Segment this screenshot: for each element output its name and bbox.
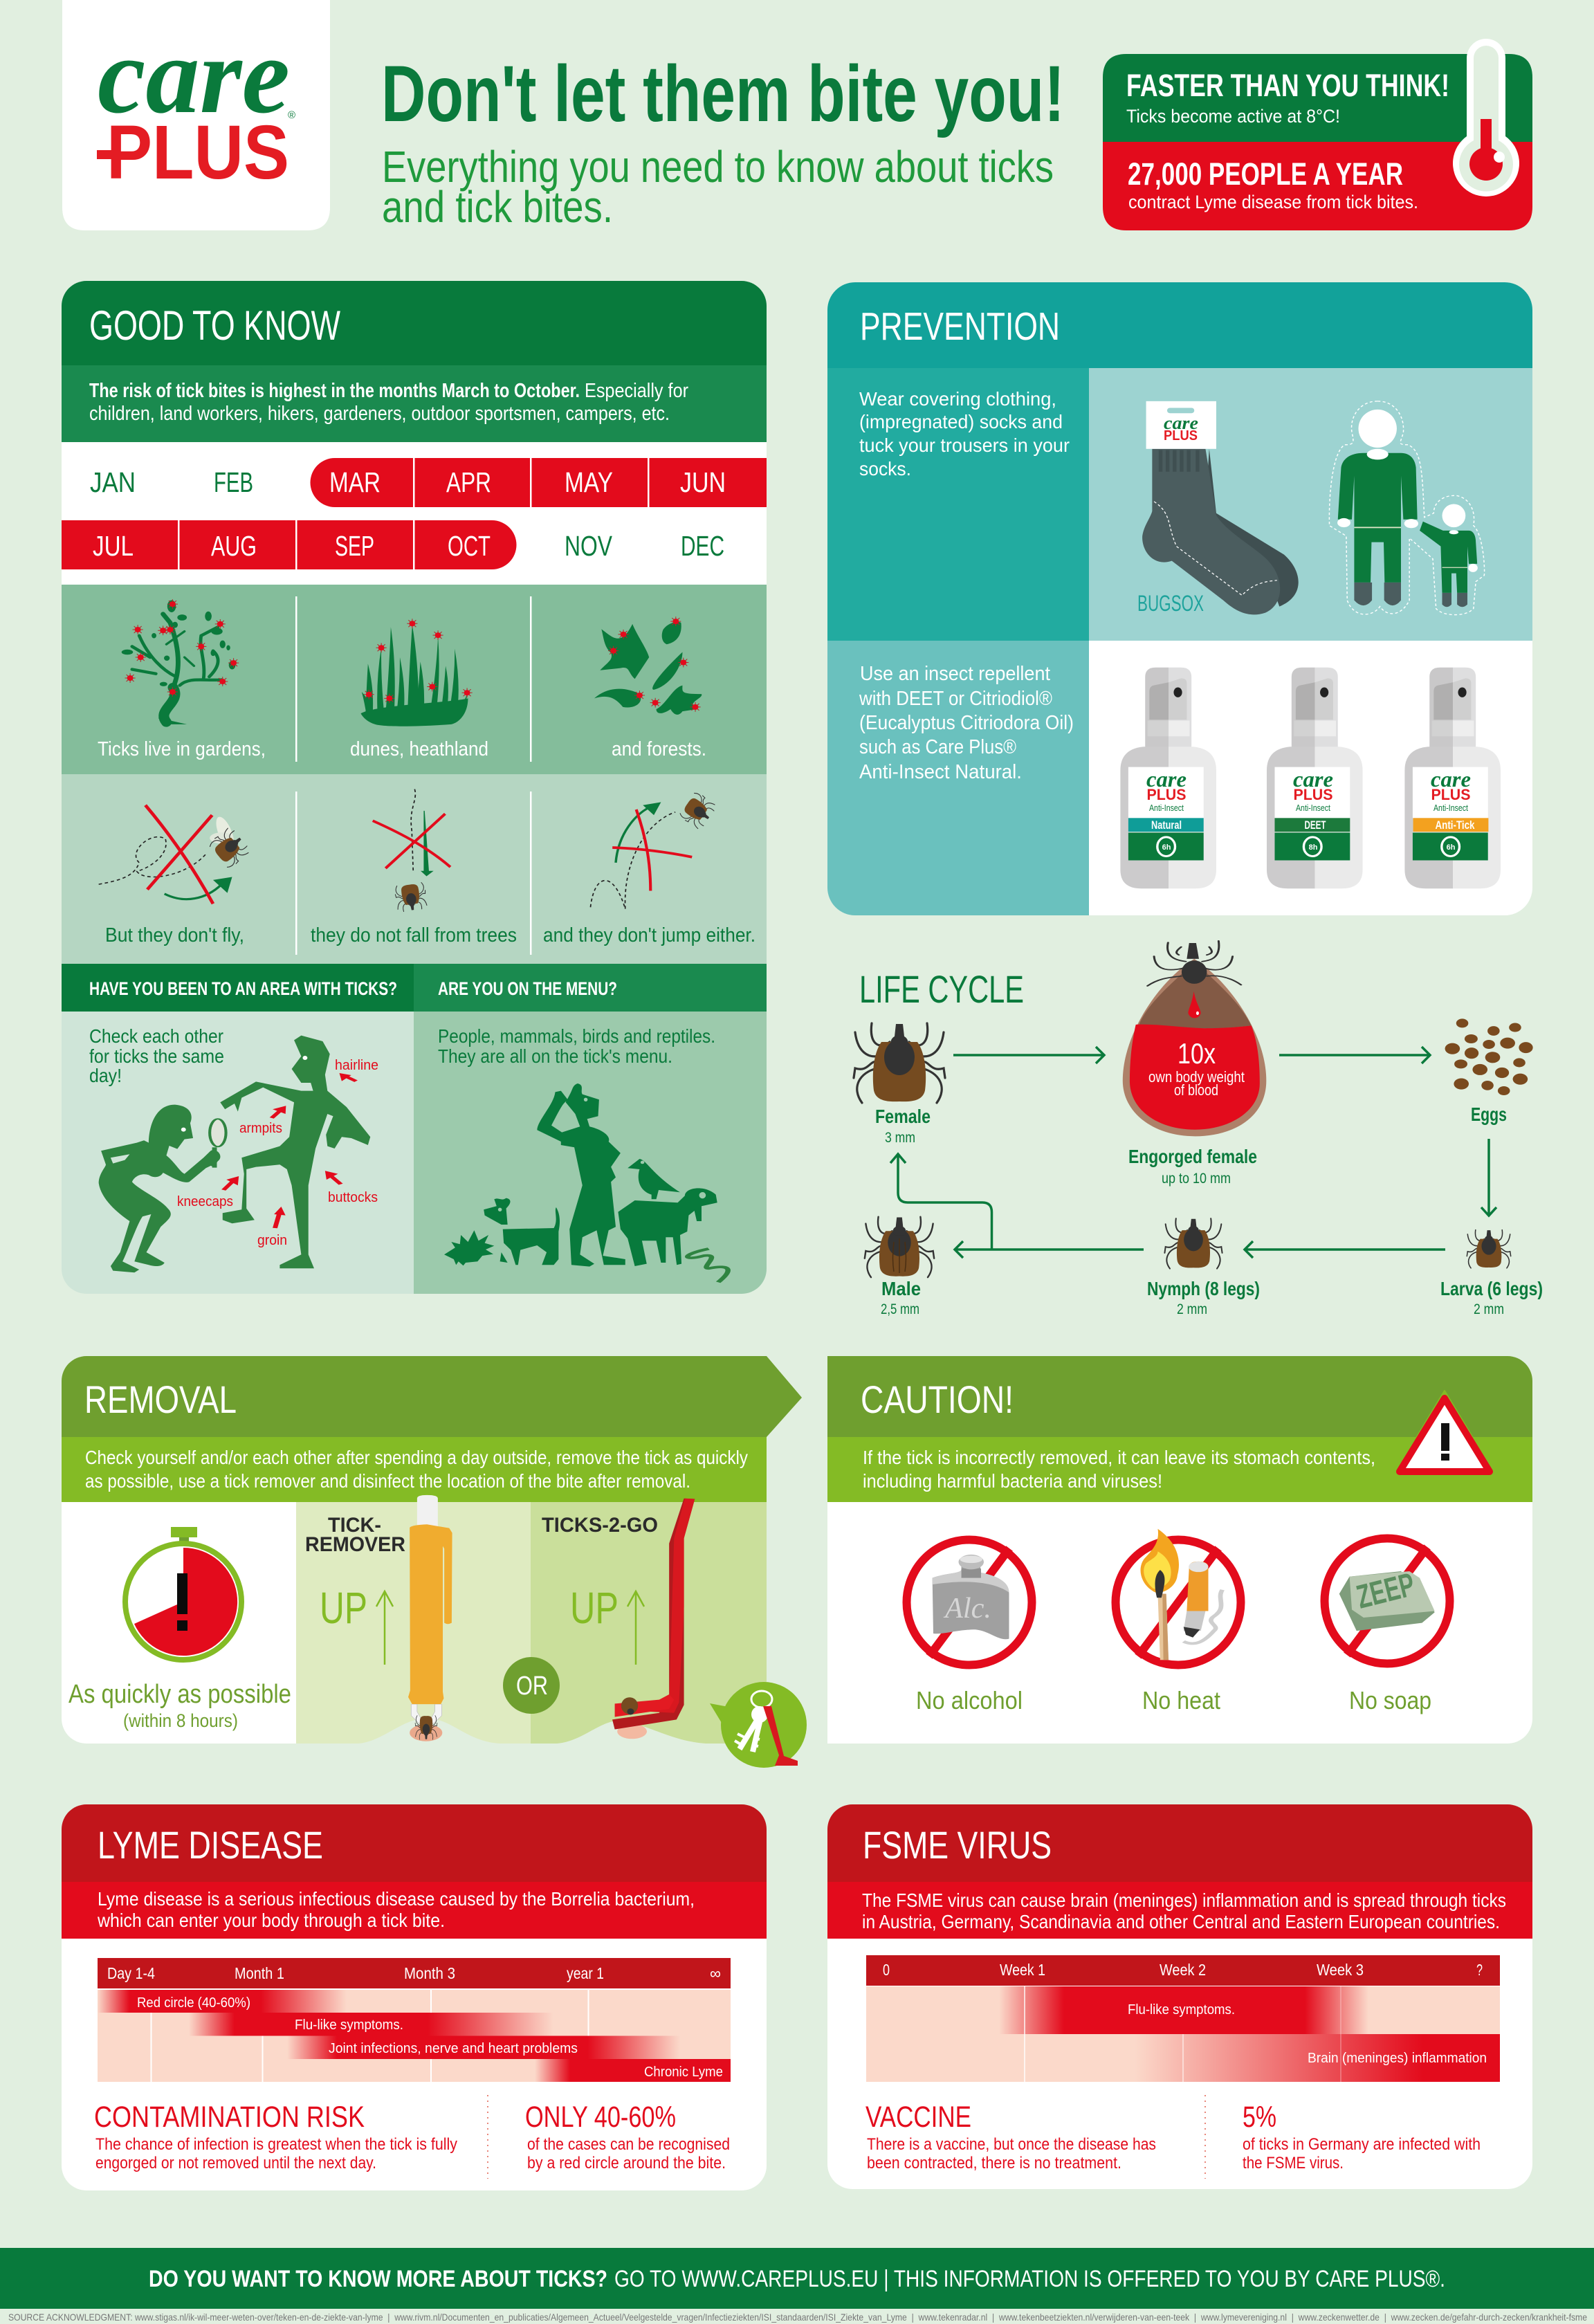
tick: female <box>854 1023 945 1146</box>
heading: fsme virus: FSME VIRUS <box>863 1823 1052 1867</box>
label: tick-remover: TICK- <box>328 1514 381 1537</box>
bottle: deet: 8h <box>1309 843 1318 852</box>
footer banner: GO TO WWW.CAREPLUS.EU | THIS INFORMATION IS OFFERED TO YOU BY CARE PLUS®. <box>614 2266 1445 2292</box>
repellent bottles block <box>1089 641 1532 915</box>
repellent advice block: Anti-Insect Natural. <box>859 761 1022 783</box>
chart: lyme timeline: year 1 <box>567 1964 604 1982</box>
repellent advice block: such as Care Plus® <box>859 736 1016 758</box>
block: 5%: of ticks in Germany are infected with <box>1243 2135 1481 2154</box>
eggs <box>1445 1018 1533 1125</box>
bottle: anti-tick: Anti-Insect <box>1433 803 1468 813</box>
logo wordmark: care: care <box>98 15 290 136</box>
bottle: natural: PLUS <box>1147 786 1186 803</box>
clothing advice block: Wear covering clothing, <box>859 388 1056 410</box>
chart: fsme timeline: Week 2 <box>1160 1961 1206 1979</box>
removal instructions <box>62 1437 767 1502</box>
illustration: woman checking man for ticks <box>99 1036 370 1272</box>
illustration: adult and child in covering clothing <box>1329 401 1485 615</box>
body-part arrows <box>223 1073 356 1228</box>
illustration: tick remover pen <box>408 1495 452 1741</box>
icon: no alcohol: Alc. <box>943 1593 991 1625</box>
stopwatch block <box>62 1502 296 1744</box>
month calendar: NOV <box>565 530 612 562</box>
fact: faster than you think: FASTER THAN YOU THINK! <box>1126 68 1449 103</box>
heading: good to know: GOOD TO KNOW <box>89 302 340 349</box>
heading: lyme disease: LYME DISEASE <box>98 1823 323 1867</box>
chart: fsme timeline: ? <box>1476 1961 1483 1979</box>
block: vaccine: VACCINE <box>865 2101 971 2134</box>
section: life cycle <box>854 941 1543 1317</box>
sock tag wordmark: PLUS <box>1164 428 1198 443</box>
advice text: day! <box>89 1065 122 1086</box>
block: only 40-60%: of the cases can be recognised <box>527 2135 730 2154</box>
badge: or <box>503 1657 560 1714</box>
month calendar: JUN <box>680 466 726 498</box>
bottle: deet: Anti-Insect <box>1296 803 1330 813</box>
block: contamination risk <box>94 2101 457 2172</box>
bottle: natural <box>1120 668 1216 888</box>
chart: fsme timeline: 0 <box>883 1961 890 1979</box>
clothing illustration block <box>1089 368 1532 641</box>
panel: removal <box>62 1356 807 1768</box>
clothing advice block: socks. <box>859 458 911 479</box>
block: only 40-60%: ONLY 40-60% <box>525 2101 676 2134</box>
labels: body parts <box>177 1058 378 1248</box>
icon: ticks don't fall <box>373 789 450 913</box>
text: as quickly as possible: As quickly as possible <box>68 1680 291 1709</box>
sock tag wordmark <box>1164 413 1198 443</box>
icon: no heat: No heat <box>1142 1686 1220 1714</box>
advice text: for ticks the same <box>89 1045 224 1067</box>
footer banner <box>0 2248 1594 2309</box>
eggs: Eggs <box>1471 1104 1507 1125</box>
icon: ticks don't fly <box>99 805 251 904</box>
tick: male: 2,5 mm <box>881 1301 919 1317</box>
icon: no soap: No soap <box>1349 1686 1431 1714</box>
white lower body <box>827 1939 1532 2189</box>
logo wordmark: PLUS: PLUS <box>107 110 289 195</box>
icon: no heat <box>1115 1529 1241 1714</box>
chart: lyme timeline: Month 1 <box>235 1964 284 1982</box>
arrow: nymph to male and female <box>890 1154 1144 1258</box>
warning text: including harmful bacteria and viruses! <box>863 1470 1162 1492</box>
block: vaccine: There is a vaccine, but once the disease has <box>867 2135 1156 2154</box>
labels: body parts: buttocks <box>328 1190 378 1205</box>
repellent advice block <box>827 641 1089 915</box>
arrow: eggs to larva <box>1481 1139 1496 1216</box>
bottle: anti-tick: 6h <box>1447 843 1456 852</box>
block: contamination risk: The chance of infection is greatest when the tick is fully <box>95 2135 457 2154</box>
chart: lyme timeline: ∞ <box>710 1964 721 1982</box>
heading: removal: REMOVAL <box>84 1378 237 1421</box>
bottle: deet: care <box>1293 767 1333 792</box>
lyme description: Lyme disease is a serious infectious disease caused by the Borrelia bacterium, <box>98 1888 695 1910</box>
bottle: natural: Natural <box>1151 818 1182 832</box>
repellent advice block: Use an insect repellent <box>860 663 1050 685</box>
icon: stopwatch <box>125 1527 241 1660</box>
tick: engorged female: 10x <box>1178 1037 1216 1070</box>
sock tag wordmark: care <box>1164 413 1198 433</box>
tick: larva: 2 mm <box>1474 1301 1504 1317</box>
chart: lyme timeline: Month 3 <box>404 1964 455 1982</box>
chart: lyme timeline: Flu-like symptoms. <box>295 2018 403 2033</box>
warning text <box>827 1437 1532 1502</box>
lyme description: which can enter your body through a tick bite. <box>97 1910 445 1931</box>
sub-panel: have you been to an area with ticks <box>62 964 414 1294</box>
tick: nymph: 2 mm <box>1177 1301 1207 1317</box>
heading: prevention: PREVENTION <box>860 304 1060 349</box>
text: as quickly as possible: (within 8 hours) <box>123 1710 238 1731</box>
subtitle <box>382 142 1054 232</box>
tick: larva <box>1440 1230 1543 1317</box>
fact: faster than you think: Ticks become active at 8°C! <box>1126 106 1340 127</box>
title: Don't let them bite you! <box>381 50 1065 138</box>
caption: gardens: Ticks live in gardens, <box>98 738 266 760</box>
icon: ticks don't jump <box>590 791 717 909</box>
illustration: bugsox sock <box>1142 401 1299 614</box>
removal instructions: as possible, use a tick remover and disinfect the location of the bite after removal. <box>85 1470 690 1492</box>
block: only 40-60%: by a red circle around the bite. <box>527 2154 726 2172</box>
icon: thermometer <box>1453 39 1519 196</box>
label: bugsox: BUGSOX <box>1137 591 1204 616</box>
tick: larva: Larva (6 legs) <box>1440 1278 1543 1299</box>
labels: body parts: hairline <box>335 1058 378 1073</box>
tick: engorged female: Engorged female <box>1128 1146 1257 1167</box>
clothing advice block: (impregnated) socks and <box>859 411 1063 432</box>
illustration: man, bird, sheep, dog, hedgehog, snake <box>444 1083 728 1282</box>
bottle: natural: care <box>1146 767 1187 792</box>
fact: 27,000 people a year <box>1128 156 1418 212</box>
removal instructions: Check yourself and/or each other after spending a day outside, remove the tick as quickly <box>85 1447 748 1468</box>
panel: prevention <box>827 282 1532 915</box>
clothing advice block <box>827 368 1089 641</box>
chart: lyme timeline: Chronic Lyme <box>644 2065 723 2080</box>
bottle: anti-tick <box>1404 668 1501 888</box>
panel: fsme virus <box>827 1804 1532 2189</box>
tick: engorged female <box>1123 941 1266 1187</box>
menu text: People, mammals, birds and reptiles. <box>438 1025 715 1047</box>
month calendar: OCT <box>448 530 491 562</box>
registered mark: ® <box>288 109 295 121</box>
up arrow <box>320 1583 393 1665</box>
up arrow <box>570 1583 644 1665</box>
panel: good to know <box>62 281 767 1294</box>
month calendar: JUL <box>93 530 134 562</box>
labels: body parts: kneecaps <box>177 1194 233 1209</box>
chart: fsme timeline: Week 3 <box>1317 1961 1364 1979</box>
month calendar: DEC <box>681 530 724 562</box>
panel: caution <box>827 1356 1532 1744</box>
caption: don't jump: and they don't jump either. <box>543 924 755 946</box>
block: 5%: 5% <box>1243 2101 1276 2134</box>
tick-remover block <box>296 1502 531 1744</box>
fsme description: The FSME virus can cause brain (meninges) inflammation and is spread through ticks <box>862 1890 1506 1911</box>
tick: engorged female: of blood <box>1174 1081 1218 1099</box>
clothing advice block: tuck your trousers in your <box>859 434 1070 456</box>
subtitle: Everything you need to know about ticks <box>382 142 1054 192</box>
block: 5%: the FSME virus. <box>1243 2154 1344 2172</box>
warning text: If the tick is incorrectly removed, it can leave its stomach contents, <box>863 1447 1375 1468</box>
caption: forests: and forests. <box>612 738 706 760</box>
repellent advice block: with DEET or Citriodiol® <box>859 688 1052 710</box>
lyme description <box>62 1882 767 1939</box>
up arrow: UP <box>570 1583 619 1633</box>
caption: dunes, heathland: dunes, heathland <box>350 738 488 760</box>
block: vaccine: been contracted, there is no treatment. <box>867 2154 1121 2172</box>
footer banner: DO YOU WANT TO KNOW MORE ABOUT TICKS? <box>149 2266 607 2292</box>
arrow: engorged to eggs <box>1279 1047 1430 1063</box>
block: 5% <box>1243 2101 1481 2172</box>
heading: life cycle: LIFE CYCLE <box>859 967 1024 1011</box>
tick: female: 3 mm <box>885 1130 915 1146</box>
chart: fsme timeline <box>866 1955 1500 2082</box>
facts box with thermometer <box>1103 39 1532 230</box>
block: vaccine <box>865 2101 1156 2172</box>
caption: don't fall from trees: they do not fall from trees <box>311 924 517 946</box>
intro text band: The risk of tick bites is highest in the months March to October. <box>89 380 580 402</box>
ticks-2-go block <box>531 1502 767 1744</box>
repellent advice block: (Eucalyptus Citriodora Oil) <box>859 712 1074 734</box>
chart: lyme timeline: Day 1-4 <box>107 1964 155 1982</box>
arrow: larva to nymph <box>1245 1241 1445 1258</box>
month calendar: FEB <box>214 466 253 498</box>
caption: don't fly: But they don't fly, <box>105 924 244 946</box>
icon: no soap <box>1324 1539 1450 1714</box>
illustration: ticks-2-go tool <box>612 1499 695 1739</box>
tick: nymph <box>1147 1218 1260 1317</box>
block: only 40-60% <box>525 2101 730 2172</box>
icon: no alcohol: No alcohol <box>916 1686 1023 1714</box>
icon: dune grass with ticks <box>360 619 473 726</box>
month calendar: MAY <box>565 466 613 498</box>
month calendar: MAR <box>329 466 381 498</box>
block: contamination risk: CONTAMINATION RISK <box>94 2101 365 2134</box>
subheading: on the menu: ARE YOU ON THE MENU? <box>438 978 617 999</box>
menu text: They are all on the tick's menu. <box>438 1045 672 1067</box>
icon: no soap: ZEEP <box>1353 1566 1418 1616</box>
bottle: anti-tick: care <box>1431 767 1471 792</box>
intro text band: children, land workers, hikers, gardeners, outdoor sportsmen, campers, etc. <box>89 403 670 425</box>
icon: leaves with ticks <box>594 616 702 715</box>
tick: female: Female <box>875 1106 931 1127</box>
chart: fsme timeline: Flu-like symptoms. <box>1128 2002 1235 2018</box>
tick: nymph: Nymph (8 legs) <box>1147 1278 1260 1299</box>
advice text: Check each other <box>89 1025 223 1047</box>
sub-panel: are you on the menu <box>414 964 767 1294</box>
bottle: natural: Anti-Insect <box>1149 803 1184 813</box>
labels: body parts: armpits <box>239 1121 282 1136</box>
chart: fsme timeline: Week 1 <box>1000 1961 1045 1979</box>
fsme description <box>827 1882 1532 1939</box>
tick held by pen <box>415 1716 437 1739</box>
skin bump shapes <box>358 1718 708 1744</box>
subheading: area with ticks: HAVE YOU BEEN TO AN AREA WITH TICKS? <box>89 978 397 999</box>
fact: faster than you think <box>1126 68 1449 127</box>
menu text <box>438 1025 715 1067</box>
chart: lyme timeline <box>98 1958 731 2082</box>
badge: keychain <box>710 1682 807 1768</box>
fact: 27,000 people a year: 27,000 PEOPLE A YEAR <box>1128 156 1403 192</box>
label: tick-remover <box>305 1514 405 1556</box>
tick: engorged female: own body weight <box>1148 1068 1245 1086</box>
bottle: deet <box>1267 668 1363 888</box>
intro text band <box>62 365 767 442</box>
myth row: how ticks do not move <box>62 774 767 964</box>
bottle: deet: DEET <box>1305 818 1326 832</box>
tick: male <box>865 1217 934 1317</box>
tick: engorged female: up to 10 mm <box>1162 1171 1231 1187</box>
month calendar: AUG <box>211 530 257 562</box>
block: contamination risk: engorged or not removed until the next day. <box>95 2154 376 2172</box>
white lower body <box>62 1939 767 2190</box>
text: as quickly as possible <box>68 1680 291 1731</box>
chart: lyme timeline: Red circle (40-60%) <box>137 1995 250 2011</box>
month calendar <box>62 442 767 585</box>
labels: body parts: groin <box>257 1233 287 1248</box>
arrow: female to engorged <box>953 1047 1104 1063</box>
chart: lyme timeline: Joint infections, nerve and heart problems <box>329 2041 578 2056</box>
icon: warning triangle <box>1393 1391 1496 1476</box>
bottle: deet: PLUS <box>1294 786 1332 803</box>
month calendar: APR <box>446 466 491 498</box>
subtitle: and tick bites. <box>382 182 613 232</box>
habitat row: where ticks live <box>62 585 767 774</box>
month calendar: JAN <box>90 466 136 498</box>
intro text band: Especially for <box>585 380 688 402</box>
bottle: anti-tick: Anti-Tick <box>1435 818 1475 832</box>
logo panel <box>62 0 330 230</box>
label: tick-remover: REMOVER <box>305 1533 405 1556</box>
fsme description: in Austria, Germany, Scandinavia and other Central and Eastern European countries. <box>862 1911 1500 1932</box>
icon: tree with ticks <box>122 599 239 724</box>
badge: or: OR <box>516 1672 548 1701</box>
up arrow: UP <box>320 1583 367 1633</box>
chart: fsme timeline: Brain (meninges) inflammation <box>1308 2051 1487 2066</box>
white block with prohibition icons <box>827 1502 1532 1744</box>
label: ticks-2-go: TICKS-2-GO <box>542 1514 658 1537</box>
icon: no alcohol <box>906 1540 1032 1714</box>
fact: 27,000 people a year: contract Lyme disease from tick bites. <box>1128 192 1418 212</box>
advice text <box>89 1025 224 1086</box>
tick: male: Male <box>881 1278 921 1299</box>
month calendar: SEP <box>335 530 374 562</box>
heading: caution: CAUTION! <box>861 1378 1014 1421</box>
panel: lyme disease <box>62 1804 767 2190</box>
bottle: anti-tick: PLUS <box>1431 786 1471 803</box>
bottle: natural: 6h <box>1162 843 1171 852</box>
